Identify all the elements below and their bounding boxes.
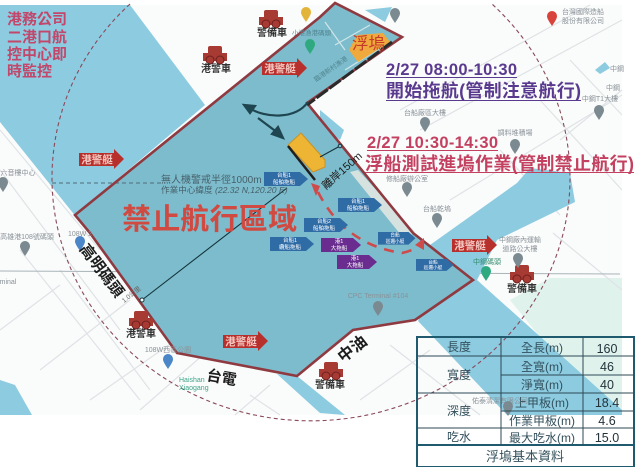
harbor control note: 二港口航 xyxy=(7,28,67,46)
vessel: 3: 台船1 xyxy=(283,236,297,244)
map place labels: 台灣國際造船 xyxy=(562,7,604,16)
map place labels: 臨港新村漁港 xyxy=(312,54,350,84)
vessel: small A: 台船 xyxy=(390,231,400,239)
car xyxy=(315,362,345,391)
police cars xyxy=(126,10,537,391)
heading: no-navigation zone: 禁止航行區域 xyxy=(122,203,297,236)
phase 2 schedule: 浮船測試進塢作業(管制禁止航行) xyxy=(365,153,634,174)
label: Gaoming pier: 高明碼頭 xyxy=(76,240,129,301)
dock specifications table: 4.6 xyxy=(598,414,616,428)
vessel: 1: 台船1 xyxy=(351,197,365,205)
harbor police boats xyxy=(79,58,497,351)
boat: 港警艇 xyxy=(454,239,486,252)
vessel: 2: 船舶拖船 xyxy=(313,224,335,232)
map place labels: 108W 2 xyxy=(68,231,92,238)
vessel: tug xyxy=(264,171,308,186)
car: 警備車 xyxy=(315,378,345,391)
map place labels: 中鋼廠內運輸 xyxy=(499,235,541,244)
map place labels: 台船乾塢 xyxy=(423,204,451,213)
label: Taipower: 台電 xyxy=(205,366,238,389)
car xyxy=(201,46,231,75)
dock specifications table: 深度 xyxy=(447,403,471,418)
boat: 港警艇 xyxy=(225,335,257,348)
vessel: purple A xyxy=(321,237,361,252)
floating dock berth xyxy=(307,33,392,105)
dock specifications table: 浮塢基本資料 xyxy=(486,449,564,464)
harbor control note: 港務公司 xyxy=(7,10,67,28)
car xyxy=(507,265,537,295)
map place labels: 修船廠辦公室 xyxy=(386,174,428,183)
map place labels: 中鋼碼頭 xyxy=(473,257,501,266)
car xyxy=(126,311,156,340)
vessel: 1 xyxy=(338,197,382,212)
phase 2 schedule: 2/27 10:30-14:30 xyxy=(367,134,498,152)
vessel: 2 xyxy=(304,217,348,232)
car: 警備車 xyxy=(507,282,537,295)
drone radius note xyxy=(161,173,288,195)
dock specifications table: 15.0 xyxy=(595,431,619,445)
vessel: 3 xyxy=(270,236,314,251)
dock specifications table: 寬度 xyxy=(447,367,471,382)
no-navigation zone outline xyxy=(75,3,473,376)
dock specifications table: 160 xyxy=(597,342,617,356)
dock specifications table: 上甲板(m) xyxy=(515,396,569,410)
boat xyxy=(262,58,307,78)
phase 1 schedule: 開始拖航(管制注意航行) xyxy=(386,80,581,101)
map place labels: 台船廠區大樓 xyxy=(404,108,446,117)
distance line 150 m: 離岸150m xyxy=(319,149,365,192)
map place labels: 中鋼 xyxy=(610,64,624,73)
vessel: purple A: 大拖船 xyxy=(331,244,348,252)
arrow: tow curve xyxy=(244,102,308,116)
boat xyxy=(79,149,124,169)
vessel: tug: 台船1 xyxy=(277,171,291,179)
phase 1 schedule: 2/27 08:00-10:30 xyxy=(386,61,517,79)
vessel: small A xyxy=(378,231,415,245)
map place labels: 小港漁港碼頭 xyxy=(292,28,332,37)
no-navigation zone fill xyxy=(75,3,473,376)
drone radius note: 無人機警戒半徑1000m xyxy=(161,173,262,186)
dock specifications table: 40 xyxy=(600,378,614,392)
phase 2 schedule xyxy=(365,134,634,174)
arrow: tow to site xyxy=(258,118,283,138)
label: CPC: 中油 xyxy=(334,332,371,366)
map place labels: 道路公大樓 xyxy=(502,244,538,253)
zone roads xyxy=(325,22,385,70)
boat xyxy=(223,331,268,351)
vessel: small A: 巡邏小艇 xyxy=(386,238,405,245)
map place labels: 中鋼T1大樓 xyxy=(582,94,618,103)
harbor control note: 控中心即 xyxy=(7,45,67,63)
map place labels: 高雄港108號碼頭 xyxy=(0,232,54,241)
vessel: small B xyxy=(416,258,453,271)
map place labels: 佑泰清潔有限公司 xyxy=(472,396,528,405)
vessel: purple B xyxy=(337,254,377,269)
vessel: tug: 船舶拖船 xyxy=(273,178,295,186)
red dashed tow route xyxy=(311,183,424,253)
dock specifications table: 18.4 xyxy=(595,396,619,410)
pier labels xyxy=(76,240,371,389)
car: 港警車 xyxy=(201,62,231,75)
vessel: small B: 巡邏小艇 xyxy=(424,264,443,271)
blue vessels xyxy=(264,171,453,271)
boat: 港警艇 xyxy=(81,153,113,166)
vessel: 2: 台船2 xyxy=(317,217,331,225)
floating dock berth: 浮塢 xyxy=(352,34,385,53)
vessel: purple B: 港1 xyxy=(351,254,359,262)
dock specifications table: 作業甲板(m) xyxy=(509,414,575,428)
vessel: purple A: 港1 xyxy=(335,237,343,245)
map place labels: 股份有限公司 xyxy=(562,16,604,25)
boat: 港警艇 xyxy=(264,62,296,75)
car xyxy=(257,10,287,39)
dock specifications table: 全長(m) xyxy=(521,341,563,355)
dock specifications table: 吃水 xyxy=(447,430,471,444)
map place labels: CPC Terminal #104 xyxy=(348,293,408,300)
vessel: small B: 台船 xyxy=(428,258,438,265)
map place labels: Xiaogang xyxy=(179,385,209,392)
harbor control note xyxy=(7,10,67,80)
vessel: purple B: 大拖船 xyxy=(347,261,364,269)
car: 警備車 xyxy=(257,26,287,39)
floating dock in tow xyxy=(288,133,325,180)
map place labels: 六音樓中心 xyxy=(0,168,36,177)
dock specifications table: 長度 xyxy=(447,339,471,354)
map place labels: 調料堆積場 xyxy=(498,128,532,137)
dock specifications table: 最大吃水(m) xyxy=(509,431,575,445)
distance line 1.0 km xyxy=(120,188,287,305)
drone radius note: 作業中心緯度 (22.32 N,120.20 E) xyxy=(161,184,288,195)
distance line 1.0 km: 1.0公里 xyxy=(120,284,143,305)
dock specifications table: 全寬(m) xyxy=(521,359,563,374)
dock specifications table xyxy=(417,337,634,467)
map place labels: minal xyxy=(0,279,17,286)
phase 1 schedule xyxy=(386,61,581,101)
shore strip xyxy=(350,170,415,240)
map place labels: 108W西區公園 xyxy=(145,346,191,354)
boat xyxy=(452,235,497,255)
dock specifications table: 淨寬(m) xyxy=(521,377,563,392)
map place labels: 中鋼 xyxy=(606,83,620,92)
drone radius dashed circle xyxy=(52,4,570,421)
car: 港警車 xyxy=(126,327,156,340)
vessel: 3: 纜船拖船 xyxy=(279,243,301,251)
vessel: 1: 船舶拖船 xyxy=(347,204,369,212)
harbor control note: 時監控 xyxy=(7,62,52,80)
dock specifications table: 46 xyxy=(600,360,614,374)
map place labels: Haishan xyxy=(179,377,205,384)
